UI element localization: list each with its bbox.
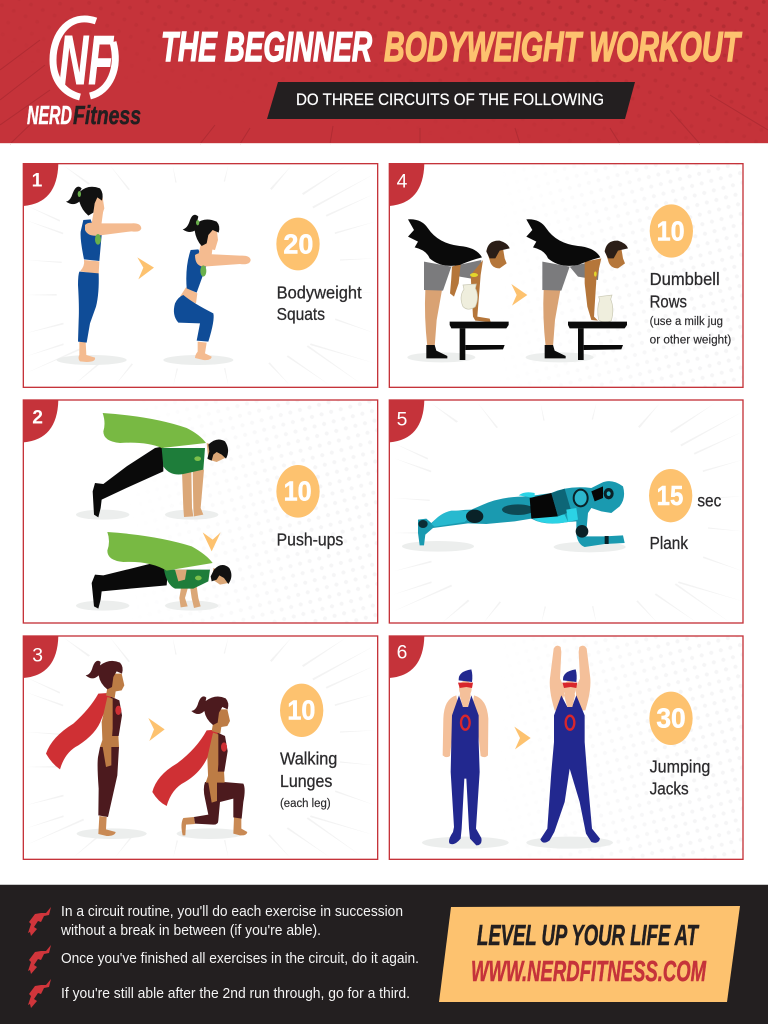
- step badge 6: [389, 636, 424, 678]
- step badge 5: 5: [397, 409, 407, 430]
- tip 1: [60, 904, 403, 939]
- subtitle ribbon: [267, 82, 635, 119]
- figure: arms up: [526, 646, 613, 849]
- hold time 15 sec: sec: [697, 490, 722, 510]
- rep count 30: [649, 692, 693, 745]
- panel 3: walking lunges: [23, 636, 378, 859]
- figure: row down: [407, 219, 510, 362]
- exercise name: Dumbbell: [650, 269, 720, 289]
- footer band: [0, 884, 768, 1024]
- logo: Nerd Fitness: Fitness: [73, 100, 141, 130]
- logo: Nerd Fitness: [27, 19, 141, 130]
- rep count 20: 20: [283, 228, 313, 259]
- figure: standing with cape: [46, 661, 147, 839]
- arrow down: [203, 532, 221, 551]
- arrow: [514, 727, 531, 749]
- exercise name: Lunges: [280, 771, 333, 791]
- figure: push-up top: [76, 413, 228, 520]
- logo: Nerd Fitness: NF: [59, 21, 114, 99]
- tip 1: without a break in between (if you're able).: [60, 923, 321, 939]
- figure: arms down: [422, 669, 509, 849]
- exercise name: Jumping: [650, 757, 710, 777]
- exercise name: Bodyweight: [277, 282, 362, 302]
- call to action box: [439, 906, 740, 1002]
- arrow: [148, 718, 165, 741]
- tip 1: In a circuit routine, you'll do each exercise in succession: [61, 904, 403, 920]
- hold time 15 sec: [649, 469, 722, 522]
- tip 2: Once you've finished all exercises in the circuit, do it again.: [61, 951, 419, 967]
- hold time 15 sec: 15: [657, 480, 683, 511]
- exercise name: Plank: [650, 533, 688, 553]
- rep count 20: [276, 218, 320, 270]
- arrow: [137, 257, 154, 279]
- step badge 2: [23, 400, 58, 442]
- exercise name: (use a milk jug: [650, 314, 723, 328]
- figure: push-up bottom: [76, 532, 231, 611]
- step badge 1: [23, 164, 58, 206]
- figure: robot plank: [402, 481, 626, 552]
- panel 5: plank: [389, 400, 743, 623]
- step badge 2: 2: [32, 407, 43, 428]
- exercise name: Squats: [277, 304, 325, 324]
- panel 1: bodyweight squats: [23, 164, 378, 387]
- step badge 3: [23, 636, 58, 678]
- exercise name: [650, 269, 731, 346]
- title: [161, 23, 742, 70]
- figure: row up: [526, 219, 628, 362]
- panel 6: jumping jacks: [389, 636, 743, 859]
- icon: hero 1: [28, 907, 51, 936]
- title: THE BEGINNER: [161, 23, 372, 70]
- icon: hero 2: [28, 945, 51, 974]
- step badge 6: 6: [397, 643, 407, 664]
- step badge 4: 4: [397, 171, 408, 192]
- panel 4: dumbbell rows: [389, 164, 743, 387]
- exercise name: Jacks: [650, 778, 689, 798]
- logo: Nerd Fitness: NERD: [27, 100, 72, 130]
- step badge 4: [389, 164, 424, 206]
- rep count 10: 10: [657, 215, 685, 246]
- exercise name: Push-ups: [277, 529, 344, 549]
- exercise name: or other weight): [650, 332, 731, 346]
- rep count 10: 10: [287, 695, 315, 726]
- exercise name: [650, 757, 710, 798]
- figure: squat: [163, 215, 251, 365]
- figure: lunge with cape: [152, 696, 247, 839]
- rep count 30: 30: [656, 703, 686, 734]
- step badge 3: 3: [32, 645, 43, 666]
- exercise name: (each leg): [280, 796, 331, 810]
- figure: standing: [57, 187, 141, 365]
- arrow: [511, 284, 527, 306]
- subtitle ribbon: DO THREE CIRCUITS OF THE FOLLOWING: [296, 90, 604, 109]
- icon: hero 3: [28, 979, 51, 1008]
- rep count 10: [276, 465, 320, 518]
- exercise name: Rows: [650, 291, 687, 311]
- step badge 1: 1: [32, 171, 43, 192]
- exercise name: [277, 282, 362, 324]
- rep count 10: [280, 684, 323, 737]
- exercise name: [280, 749, 337, 810]
- panel 2: push-ups: [23, 400, 378, 623]
- step badge 5: [389, 400, 424, 442]
- exercise name: Walking: [280, 749, 337, 769]
- header banner: [0, 0, 768, 144]
- rep count 10: [650, 204, 693, 258]
- rep count 10: 10: [284, 476, 312, 507]
- tip 3: If you're still able after the 2nd run through, go for a third.: [61, 986, 410, 1002]
